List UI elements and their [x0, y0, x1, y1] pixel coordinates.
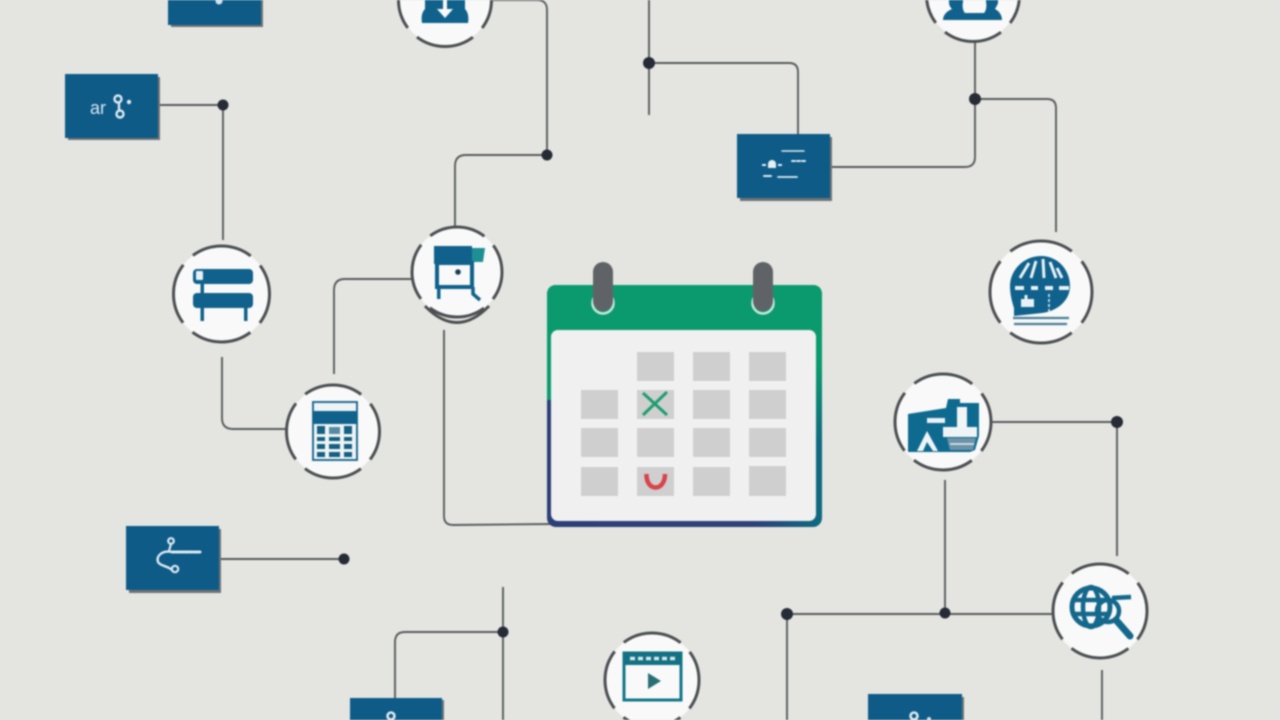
connector: machine node to search node [988, 416, 1123, 556]
icon: two people silhouettes [943, 0, 1002, 20]
green cross mark [643, 392, 667, 415]
connector: bottom box to junction [395, 587, 508, 720]
connector: bench node to calculator node [222, 357, 288, 429]
box: glyph label left [65, 74, 160, 140]
node: machine [895, 374, 991, 470]
calendar body [547, 285, 822, 527]
icon: calculator [313, 402, 357, 460]
node: bench [174, 246, 270, 342]
node: calculator [286, 385, 380, 478]
connector: lower-left box [219, 554, 350, 564]
connector: blue box to top-right people node and globe node [830, 42, 1056, 232]
box: molecule lower-left [126, 526, 221, 593]
connector: calculator node to desk node [334, 279, 413, 374]
icon: bench [193, 269, 253, 321]
calendar green header [547, 285, 822, 440]
node: search globe [1053, 564, 1147, 658]
node: top-left people [398, 0, 492, 46]
icon: globe with magnifier [1072, 587, 1131, 636]
icon: two people [422, 0, 468, 23]
connector: search node downward [1101, 670, 1103, 720]
connector: desk node to calendar [444, 330, 552, 525]
connector: desk node to top people node [455, 0, 552, 226]
node: globe [990, 241, 1092, 343]
icon: industrial machine [908, 399, 979, 452]
icon: globe with base [1010, 256, 1070, 324]
node: video player [605, 633, 699, 720]
calendar page [551, 330, 816, 521]
connector: top centre junction to blue box [643, 0, 798, 134]
box: bottom right cropped [868, 694, 964, 720]
box: bottom left cropped [350, 698, 444, 720]
calendar [547, 262, 822, 527]
binder ring left [592, 262, 614, 314]
connector: machine node down to horizontal bus [781, 480, 1054, 720]
node: top-right people [926, 0, 1020, 42]
box: glyph label left: ar [90, 98, 106, 118]
icon: video window [624, 652, 681, 700]
date grid [581, 352, 786, 496]
binder ring right [752, 262, 774, 314]
icon: desk [434, 246, 485, 300]
box: top-left cropped [168, 0, 263, 27]
node: desk / cabinet [412, 227, 502, 322]
box: small details top-right [737, 134, 832, 201]
connector: top-left box to bench node [158, 100, 228, 240]
red arc mark [646, 474, 665, 488]
